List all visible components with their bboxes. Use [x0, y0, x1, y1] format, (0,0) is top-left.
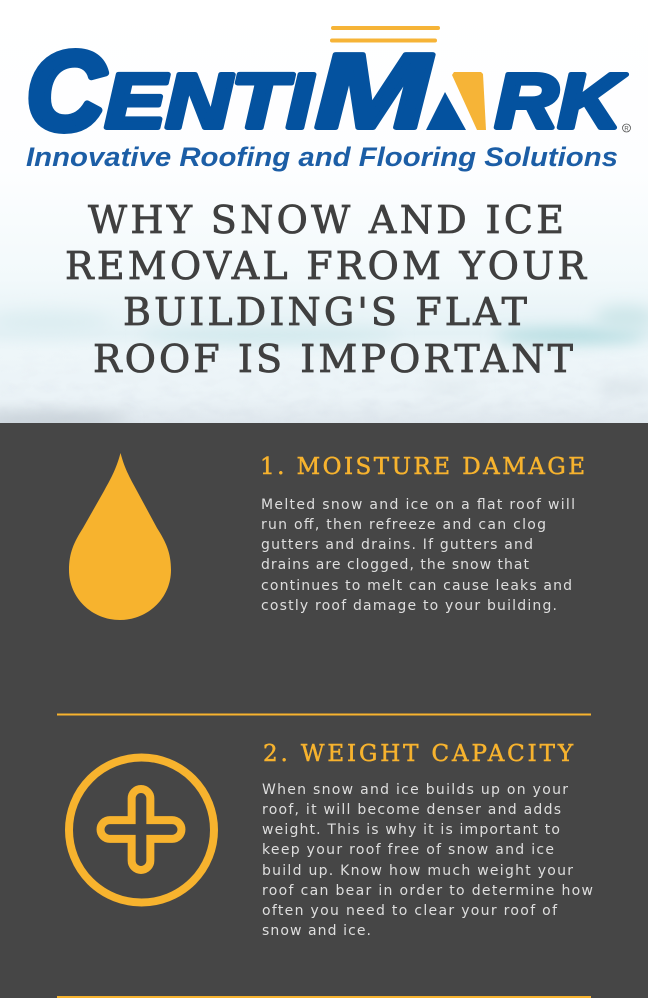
bottom divider — [57, 996, 591, 998]
text: weight capacity — [262, 782, 593, 939]
divider — [57, 714, 591, 716]
logo: CentiMark — [26, 26, 630, 172]
text: weight capacity: keep your roof free of snow and ice — [262, 842, 554, 858]
text: weight capacity: build up. Know how much weight your — [262, 863, 573, 879]
logo wordmark: C — [26, 30, 106, 154]
title: REMOVAL FROM YOUR — [65, 244, 587, 288]
icon: water drop — [69, 453, 171, 620]
text: weight capacity: often you need to clear your roof of — [262, 903, 558, 919]
logo wordmark: M — [315, 32, 433, 150]
logo wordmark: ENTI — [105, 58, 314, 144]
text: moisture damage — [261, 497, 575, 614]
logo stripes — [330, 26, 440, 42]
title: WHY SNOW AND ICE — [88, 198, 564, 242]
background: snowy header — [0, 230, 648, 423]
registered mark — [622, 124, 630, 132]
text: weight capacity: weight. This is why it is important to — [262, 822, 560, 838]
text: moisture damage: gutters and drains. If gutters and — [261, 537, 533, 553]
section 2: weight capacity — [69, 741, 593, 939]
text: moisture damage: costly roof damage to your building. — [261, 598, 557, 614]
heading: moisture damage: 1. MOISTURE DAMAGE — [260, 454, 585, 480]
title: ROOF IS IMPORTANT — [93, 337, 573, 381]
text: weight capacity: snow and ice. — [262, 923, 371, 939]
title: BUILDING'S FLAT — [123, 290, 527, 334]
text: weight capacity: roof can bear in order to determine how — [262, 883, 593, 899]
text: moisture damage: run off, then refreeze and can clog — [261, 517, 546, 533]
text: moisture damage: drains are clogged, the snow that — [261, 557, 530, 573]
text: weight capacity: When snow and ice builds up on your — [262, 782, 568, 798]
logo tagline: Innovative Roofing and Flooring Solutions — [26, 142, 618, 172]
title — [65, 198, 587, 381]
text: moisture damage: continues to melt can cause leaks and — [261, 578, 572, 594]
registered mark: R — [624, 126, 629, 132]
logo wordmark — [26, 30, 627, 154]
heading: weight capacity: 2. WEIGHT CAPACITY — [263, 741, 574, 767]
section 1: moisture damage — [69, 453, 585, 620]
logo: roof shaped letter A — [426, 72, 486, 130]
icon: circled plus — [69, 758, 214, 902]
text: moisture damage: Melted snow and ice on a flat roof will — [261, 497, 575, 513]
text: weight capacity: roof, it will become denser and adds — [262, 802, 561, 818]
dark content panel — [0, 423, 648, 998]
logo wordmark: RK — [495, 58, 627, 144]
